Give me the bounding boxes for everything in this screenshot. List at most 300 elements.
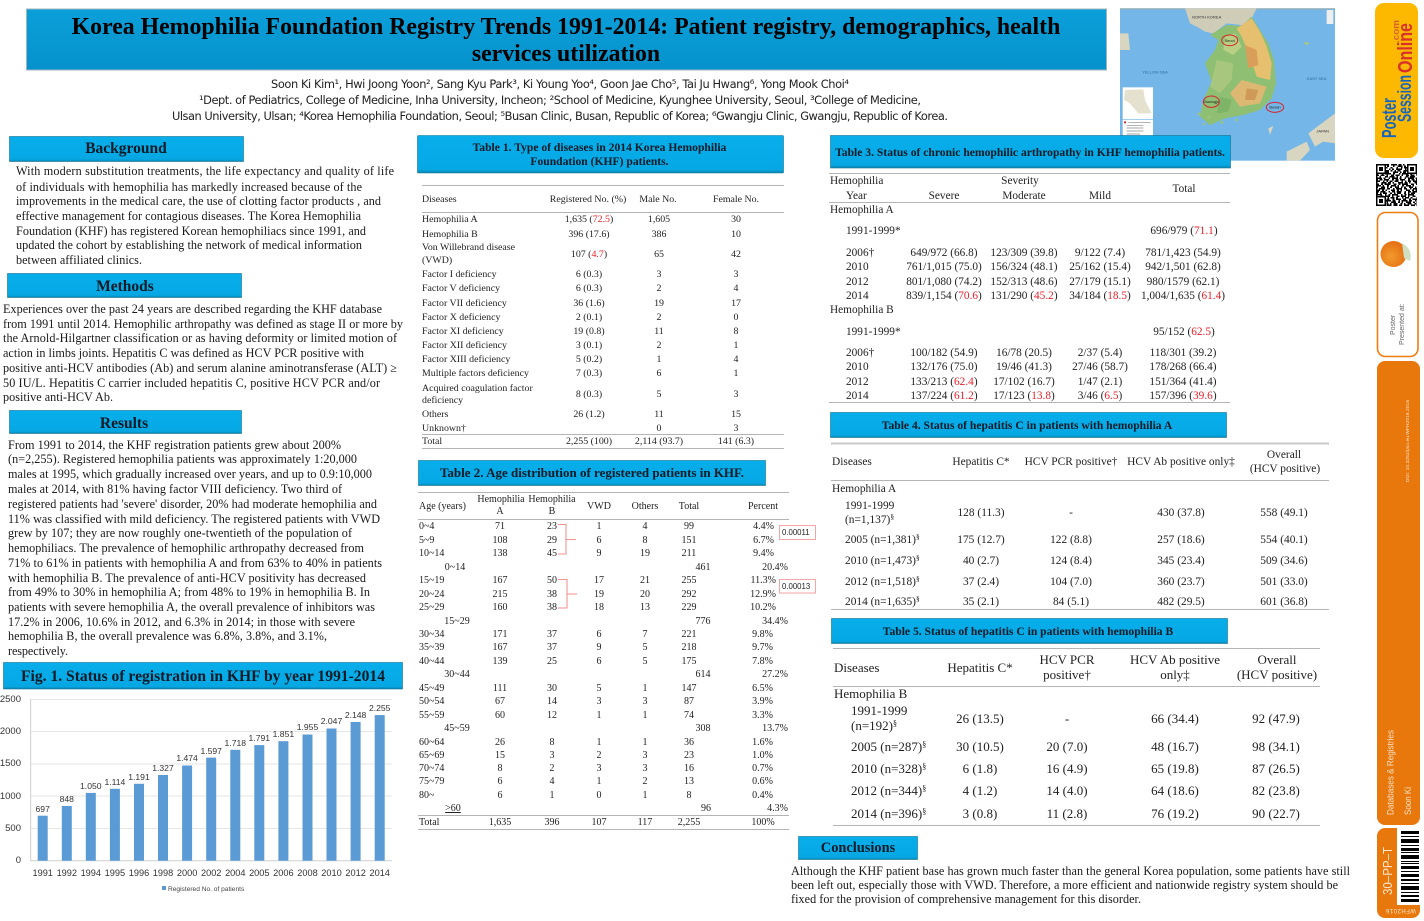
heading: figure 1 <box>4 662 402 689</box>
bar value labels: 1.050 <box>80 781 102 791</box>
table 2 data: 3 <box>596 763 602 774</box>
table 5 data: 48 (16.7) <box>1151 739 1199 754</box>
bar value labels <box>36 703 391 814</box>
heading: results: Results <box>100 415 148 432</box>
table 2 data: 0.7% <box>752 763 773 774</box>
table 2 data: 3 <box>642 750 648 761</box>
table 1 data: 1,635 (72.5) <box>565 214 613 225</box>
table 1 data: 65 <box>654 249 664 260</box>
table 2 data: 38 <box>547 589 557 600</box>
results text: From 1991 to 2014, the KHF registration patients grew about 200% <box>8 438 341 452</box>
table 1 data: 5 (0.2) <box>576 354 602 365</box>
sidebar: presented at panel <box>1378 212 1418 356</box>
bar value labels: 1.718 <box>225 738 246 748</box>
heading: background: Background <box>85 140 167 157</box>
table 2 data: A <box>496 506 504 517</box>
table 3 data: 157/396 (39.6) <box>1149 390 1217 402</box>
table 2 data: 1 <box>596 710 602 721</box>
table 2 data: 14 <box>547 696 557 707</box>
bar chart: registered patients by year: 2500 <box>0 694 21 705</box>
table 2 data: 20 <box>640 589 650 600</box>
sidebar: PosterSessionOnline logo: .com <box>1391 20 1401 43</box>
table 2 data: 2 <box>596 750 602 761</box>
table 1 data: 5 <box>657 389 662 400</box>
table 5 data: Overall <box>1258 652 1297 667</box>
table 2 data: 13 <box>640 602 650 613</box>
heading: table 5 <box>832 618 1228 644</box>
table 2 data: 15~19 <box>419 575 444 586</box>
table 4 data: 558 (49.1) <box>1260 507 1308 519</box>
table 2 data: 3.9% <box>752 696 773 707</box>
table 4 data: (n=1,137) <box>845 514 890 526</box>
panel: table 1 <box>418 136 784 448</box>
authors and affiliations: Soon Ki Kim¹, Hwi Joong Yoon², Sang Kyu Park³, Ki Young Yoo⁴, Goon Jae Cho⁵, Tai Ju Hwang⁶, Yong Mook Choi⁴ <box>271 77 849 91</box>
table 3 data: 1991-1999* <box>846 326 901 338</box>
table 3 data: 9/122 (7.4) <box>1075 247 1125 259</box>
table 1 data: 7 (0.3) <box>576 368 602 379</box>
table 5 data: Hepatitis C* <box>947 660 1013 675</box>
year axis labels: 1996 <box>129 868 149 878</box>
background text <box>16 164 394 267</box>
table 2 data: 50 <box>547 575 557 586</box>
table 2 data: 2,255 <box>678 817 700 828</box>
table 1 data: 2 (0.1) <box>576 312 602 323</box>
sidebar: orange category panel: Soon Ki <box>1403 787 1413 815</box>
table 1 data: 1 <box>734 368 739 379</box>
table 2 data: 75~79 <box>419 776 444 787</box>
table 2 data: 6 <box>498 776 502 787</box>
table 3 data <box>829 174 1230 402</box>
table 3 data: 1991-1999* <box>846 225 901 237</box>
table 2 data: 107 <box>592 817 606 828</box>
heading: table 1 <box>418 136 784 173</box>
table 2 data: VWD <box>587 501 611 512</box>
table 5 data: 2014 (n=396) <box>851 806 922 821</box>
year axis labels: 1995 <box>105 868 125 878</box>
table 2 data: 3.3% <box>752 710 773 721</box>
table 3 data: 2014 <box>846 290 869 302</box>
table 2 data: 6 <box>498 790 502 801</box>
table 1 data: 19 (0.8) <box>573 326 605 337</box>
table 1 data: 4 <box>734 283 739 294</box>
table 3 data: 27/179 (15.1) <box>1069 276 1131 288</box>
table 2 data: 614 <box>696 669 710 680</box>
table 2 data: 218 <box>682 642 696 653</box>
table 5 data: 98 (34.1) <box>1252 739 1300 754</box>
table 1 data: 1 <box>657 354 662 365</box>
table 5 data: only‡ <box>1160 667 1190 682</box>
table 3 data: Mild <box>1089 190 1111 202</box>
table 5 data: 20 (7.0) <box>1046 739 1088 754</box>
map of South Korea with clinic locations: Gwangju <box>1203 99 1219 104</box>
table 4 data: § <box>916 574 920 583</box>
table 1 data: 3 <box>657 269 662 280</box>
bar chart: registered patients by year: 500 <box>5 823 21 834</box>
methods text: 50 IU/L. Hepatitis C carrier included hepatitis C, positive HCV PCR and/or <box>3 376 380 390</box>
table 3 data: 2010 <box>846 361 869 373</box>
table 4 data: 1991-1999 <box>845 500 895 512</box>
table 4 data: 2010 (n=1,473) <box>845 555 916 567</box>
table 4 data: HCV Ab positive only‡ <box>1127 456 1235 468</box>
table 5 data: positive† <box>1043 667 1091 682</box>
results text: hemophilia B, the overall prevalence was 6.8%, 3.8%, and 3.1%, <box>8 629 327 643</box>
table 1 data: 141 (6.3) <box>718 436 754 447</box>
table 2 data: 23 <box>684 750 694 761</box>
table 2 data: 99 <box>684 521 694 532</box>
table 5 data: (HCV positive) <box>1237 667 1317 682</box>
table 4 data: 124 (8.4) <box>1050 555 1092 567</box>
sidebar: PosterSessionOnline logo: Online <box>1395 23 1417 73</box>
table 1 data: 17 <box>731 298 741 309</box>
results text <box>8 438 382 658</box>
table 5 data: 4 (1.2) <box>963 783 997 798</box>
table 3 data: 100/182 (54.9) <box>910 347 978 359</box>
table 4 data: 2012 (n=1,518) <box>845 576 916 588</box>
results text: males at 2014, with 81% having factor VIII deficiency. Two third of <box>8 482 343 496</box>
table 2 data: 0.6% <box>752 776 773 787</box>
table 2 data: Total <box>679 501 699 512</box>
table 1 data: 2 <box>657 340 662 351</box>
table 4 data: 501 (33.0) <box>1260 576 1308 588</box>
bar value labels: 1.597 <box>200 746 222 756</box>
year axis labels: 2004 <box>225 868 246 878</box>
table 2 data: 1 <box>642 683 648 694</box>
table 3 data: 980/1579 (62.1) <box>1147 276 1220 288</box>
table 2 data: 1 <box>642 710 648 721</box>
table 5 data: Diseases <box>834 660 880 675</box>
sidebar: poster number and barcode: 30–PP–T <box>1380 847 1395 895</box>
table 1 data: Acquired coagulation factor <box>422 383 533 394</box>
table 2 data: 13 <box>684 776 694 787</box>
table 1 data: 26 (1.2) <box>573 409 605 420</box>
table 1 data: 386 <box>652 229 666 240</box>
table 2 data: 12 <box>547 710 557 721</box>
table 1 data: 11 <box>654 326 664 337</box>
table 4 data: 509 (34.6) <box>1260 555 1308 567</box>
table 2 data: 25 <box>547 656 557 667</box>
table 2 data: 167 <box>492 642 508 653</box>
heading: table 4: Table 4. Status of hepatitis C in patients with hemophilia A <box>882 419 1173 432</box>
table 3 data: 25/162 (15.4) <box>1069 261 1131 273</box>
p-value bracket 2: 0.00013 <box>782 582 810 591</box>
table 2 data: 12.9% <box>750 589 776 600</box>
heading: table 1: Table 1. Type of diseases in 2014 Korea Hemophilia <box>473 141 727 154</box>
table 3 data: 27/46 (58.7) <box>1072 361 1128 373</box>
year axis labels: 1992 <box>57 868 77 878</box>
table 4 data: Hepatitis C* <box>952 456 1010 468</box>
table 3 data: 118/301 (39.2) <box>1150 347 1217 359</box>
table 4 data: 554 (40.1) <box>1260 534 1308 546</box>
table 3 data: 942/1,501 (62.8) <box>1145 261 1221 273</box>
table 2 data: 21 <box>640 575 650 586</box>
table 2 data: 8 <box>642 535 648 546</box>
conclusions text <box>791 864 1351 906</box>
sidebar: orange category panel: DOI: 10.3252/pso.eu.WFH2016.2016 <box>1405 400 1411 482</box>
table 2 data: 30~34 <box>419 629 444 640</box>
table 2 data: 30 <box>547 683 557 694</box>
title banner: services utilization <box>472 41 660 67</box>
table 2 data: 111 <box>493 683 507 694</box>
year axis labels: 2005 <box>249 868 270 878</box>
heading: table 3: Table 3. Status of chronic hemophilic arthropathy in KHF hemophilia patients. <box>835 146 1225 159</box>
table 2 data: 13.7% <box>762 723 788 734</box>
heading: conclusions: Conclusions <box>821 840 896 856</box>
heading: methods: Methods <box>96 278 154 295</box>
sidebar: presented at panel: Presented at: <box>1399 303 1406 345</box>
table 2 data: 10.2% <box>750 602 776 613</box>
methods text: the Arnold-Hilgartner classification or as having deformity or limited motion of <box>3 331 398 345</box>
table 1 data: 107 (4.7) <box>571 249 607 260</box>
table 2 data: 151 <box>682 535 696 546</box>
results text: registered patients had 'severe' disorder, 20% had moderate hemophilia and <box>8 497 377 511</box>
table 3 data: 2010 <box>846 261 869 273</box>
table 3 data: Hemophilia B <box>830 304 894 316</box>
results text: with hemophilia B. The prevalence of anti-HCV positivity has decreased <box>8 571 366 585</box>
table 2 data: 8 <box>550 737 554 748</box>
table 2 data: 1 <box>596 737 602 748</box>
table 2 data: 25~29 <box>419 602 444 613</box>
table 1 data: Unknown† <box>422 423 466 434</box>
table 2 data: 6 <box>596 629 602 640</box>
table 3 data: 17/102 (16.7) <box>993 376 1055 388</box>
sidebar: orange category panel: Databases & Registries <box>1386 730 1396 815</box>
table 1 data: Total <box>422 436 442 447</box>
results text: males at 1995, which gradually increased over years, and up to 0.9:10,000 <box>8 467 372 481</box>
table 2 data: 20~24 <box>419 589 444 600</box>
table 2 data: 80~ <box>419 790 435 801</box>
table 1 data: 42 <box>731 249 741 260</box>
table 4 data: 345 (23.4) <box>1157 555 1205 567</box>
table 1 data: 3 <box>734 269 739 280</box>
authors and affiliations: ¹Dept. of Pediatrics, College of Medicine, Inha University, Incheon; ²School of Medicine, Kyunghee University, Seoul, ³College of Medicine, <box>199 93 921 107</box>
bar value labels: 2.148 <box>345 710 367 720</box>
table 2 data: 211 <box>682 548 696 559</box>
conclusions text: fixed for the provision of comprehensive management for this disorder. <box>791 892 1141 906</box>
bar value labels: 1.191 <box>128 772 150 782</box>
bar value labels: 2.255 <box>369 703 391 713</box>
bar value labels: 1.955 <box>297 722 318 732</box>
results text: patients with severe hemophilia A, the overall prevalence of inhibitors was <box>8 600 375 614</box>
table 2 data: 65~69 <box>419 750 444 761</box>
table 2 data: 37 <box>547 629 557 640</box>
table 2 data: 26 <box>495 737 505 748</box>
table 5 data: § <box>922 807 926 816</box>
table 2 data: 23 <box>547 521 557 532</box>
table 2 data: Age (years) <box>419 501 466 512</box>
table 2 data: 29 <box>547 535 557 546</box>
table 2 data: 6 <box>596 535 602 546</box>
panel: conclusions <box>791 836 1351 906</box>
table 1 data: 1,605 <box>648 214 670 225</box>
table 2 data: 3 <box>550 750 554 761</box>
table 3 data: 132/176 (75.0) <box>910 361 978 373</box>
bar value labels: 2.047 <box>321 716 342 726</box>
table 1 data: 3 <box>734 423 739 434</box>
table 1 data: Factor V deficiency <box>422 283 500 294</box>
table 2 data: 71 <box>495 521 505 532</box>
p-value bracket 2 <box>558 580 816 608</box>
map of South Korea with clinic locations: EAST SEA <box>1307 76 1327 81</box>
table 2 data: 15 <box>495 750 505 761</box>
table 3 data: 1,004/1,635 (61.4) <box>1141 290 1225 302</box>
heading: table 3 <box>830 136 1230 168</box>
table 5 data: 65 (19.8) <box>1151 761 1199 776</box>
heading: background <box>10 136 244 162</box>
panel: background <box>10 136 394 267</box>
table 2 data: 7.8% <box>752 656 773 667</box>
table 2 data: 3 <box>642 763 648 774</box>
table 2 data: 5 <box>642 656 648 667</box>
table 1 data: Others <box>422 409 448 420</box>
year axis labels: 2002 <box>201 868 221 878</box>
table 3 data: 1/47 (2.1) <box>1078 376 1123 388</box>
table 1 data: 30 <box>731 214 741 225</box>
map of South Korea with clinic locations: YELLOW SEA <box>1142 69 1168 74</box>
table 2 data: 5~9 <box>419 535 434 546</box>
bar value labels: 848 <box>60 794 74 804</box>
table 3 data: 19/46 (41.3) <box>996 361 1052 373</box>
methods text: positive anti-HCV Ab. <box>3 390 113 404</box>
table 2 data: 67 <box>495 696 505 707</box>
table 1 data: 8 <box>734 326 739 337</box>
table 2 data: 87 <box>684 696 694 707</box>
table 5 data: 87 (26.5) <box>1252 761 1300 776</box>
bar value labels: 697 <box>36 804 50 814</box>
table 2 data: 4.3% <box>767 803 788 814</box>
table 1 data: 19 <box>654 298 664 309</box>
table 2 data: 40~44 <box>419 656 444 667</box>
table 2 data: 1.0% <box>752 750 773 761</box>
table 3 data: Severity <box>1001 175 1039 187</box>
table 5 data: 66 (34.4) <box>1151 711 1199 726</box>
table 4 data: Overall <box>1267 449 1301 461</box>
table 2 data: 776 <box>696 616 710 627</box>
table 5 data: 90 (22.7) <box>1252 806 1300 821</box>
table 4 data: Hemophilia A <box>832 483 897 495</box>
table 5 data: 11 (2.8) <box>1047 806 1087 821</box>
background text: Foundation (KHF) has registered Korean hemophiliacs since 1991, and <box>16 224 366 238</box>
table 4 data: § <box>916 532 920 541</box>
bar value labels: 1.327 <box>152 763 174 773</box>
table 2 data: 138 <box>492 548 508 559</box>
background text: updated the cohort by establishing the network of medical information <box>16 238 362 252</box>
table 2 data: 2 <box>550 763 554 774</box>
table 2 data: Hemophilia <box>477 494 525 505</box>
table 3 data: 2012 <box>846 376 869 388</box>
table 1 data <box>422 186 784 448</box>
background text: of individuals with hemophilia has markedly increased because of the <box>16 180 362 194</box>
results text: hemophiliacs. The prevalence of hemophilic arthropathy decreased from <box>8 541 365 555</box>
table 5 data: 64 (18.6) <box>1151 783 1199 798</box>
table 2 data: 70~74 <box>419 763 444 774</box>
results text: from 49% to 30% in hemophilia A; from 48% to 19% in hemophilia B. In <box>8 585 370 599</box>
table 2 data: 9.4% <box>753 548 774 559</box>
table 2 data: 30~44 <box>444 669 470 680</box>
table 5 data: § <box>922 762 926 771</box>
background text: between affiliated clinics. <box>16 253 142 267</box>
table 2 data: 1,635 <box>489 817 511 828</box>
table 2 data: B <box>549 506 556 517</box>
table 3 data: 801/1,080 (74.2) <box>906 276 982 288</box>
table 4 data: 37 (2.4) <box>963 576 999 588</box>
table 2 data: 175 <box>682 656 696 667</box>
table 2 data: 5 <box>642 642 648 653</box>
table 1 data: 4 <box>734 354 739 365</box>
table 1 data: 3 (0.1) <box>576 340 602 351</box>
table 4 data: 35 (2.1) <box>963 596 999 608</box>
table 1 data: 6 (0.3) <box>576 269 602 280</box>
table 1 data: 2 <box>657 312 662 323</box>
table 3 data: Total <box>1172 183 1196 195</box>
background text: improvements in the medical care, the use of clotting factor products , and <box>16 194 381 208</box>
table 4 data: 175 (12.7) <box>957 534 1005 546</box>
table 2 data: 171 <box>492 629 508 640</box>
table 2 data: 292 <box>682 589 696 600</box>
table 3 data: 839/1,154 (70.6) <box>906 290 982 302</box>
table 2 data <box>418 492 789 830</box>
table 1 data: 6 (0.3) <box>576 283 602 294</box>
heading: methods <box>8 274 242 298</box>
bar chart: registered patients by year <box>0 694 392 893</box>
table 4 data: Diseases <box>832 456 872 468</box>
table 3 data: Hemophilia A <box>830 204 895 216</box>
table 2 data: Percent <box>748 501 778 512</box>
table 2 data: 0~4 <box>419 521 434 532</box>
bars <box>38 715 385 861</box>
table 1 data: 2 <box>657 283 662 294</box>
table 3 data: 16/78 (20.5) <box>996 347 1052 359</box>
authors and affiliations <box>172 77 948 123</box>
table 2 data: 37 <box>547 642 557 653</box>
heading: table 5: Table 5. Status of hepatitis C in patients with hemophilia B <box>883 625 1173 638</box>
table 2 data: 255 <box>682 575 696 586</box>
table 2 data: 34.4% <box>762 616 788 627</box>
table 1 data: 10 <box>731 229 741 240</box>
table 4 data: - <box>1069 507 1073 519</box>
table 1 data: Factor XI deficiency <box>422 326 504 337</box>
table 5 data: - <box>1065 711 1069 726</box>
table 5 data: 1991-1999 <box>851 703 907 718</box>
table 3 data: 649/972 (66.8) <box>910 247 978 259</box>
table 5 data: Hemophilia B <box>834 686 908 701</box>
table 1 data: 8 (0.3) <box>576 389 602 400</box>
table 3 data: 17/123 (13.8) <box>993 390 1055 402</box>
methods text <box>3 302 404 404</box>
map of South Korea with clinic locations <box>1120 8 1335 161</box>
bar chart: registered patients by year: 0 <box>16 855 21 866</box>
table 5 data: 2012 (n=344) <box>851 783 922 798</box>
table 2 data: >60 <box>445 803 461 814</box>
table 3 data: 781/1,423 (54.9) <box>1145 247 1221 259</box>
table 3 data: 123/309 (39.8) <box>990 247 1058 259</box>
table 1 data: Registered No. (%) <box>550 194 626 205</box>
table 3 data: 2/37 (5.4) <box>1078 347 1123 359</box>
table 2 data: 9.7% <box>752 642 773 653</box>
results text: 71% to 61% in patients with hemophilia A and from 63% to 40% in patients <box>8 556 382 570</box>
table 4 data: HCV PCR positive† <box>1025 456 1118 468</box>
heading: table 1: Foundation (KHF) patients. <box>530 155 669 168</box>
table 4 data: 601 (36.8) <box>1260 596 1308 608</box>
table 4 data: 360 (23.7) <box>1157 576 1205 588</box>
table 2 data: 45 <box>547 548 557 559</box>
table 1 data: Hemophilia A <box>422 214 479 225</box>
table 2 data: 2 <box>642 776 648 787</box>
table 2 data: 9 <box>596 548 602 559</box>
table 3 data: 131/290 (45.2) <box>990 290 1058 302</box>
table 2 data: 60 <box>495 710 505 721</box>
table 1 data: 3 <box>734 389 739 400</box>
table 3 data: Year <box>846 190 867 202</box>
